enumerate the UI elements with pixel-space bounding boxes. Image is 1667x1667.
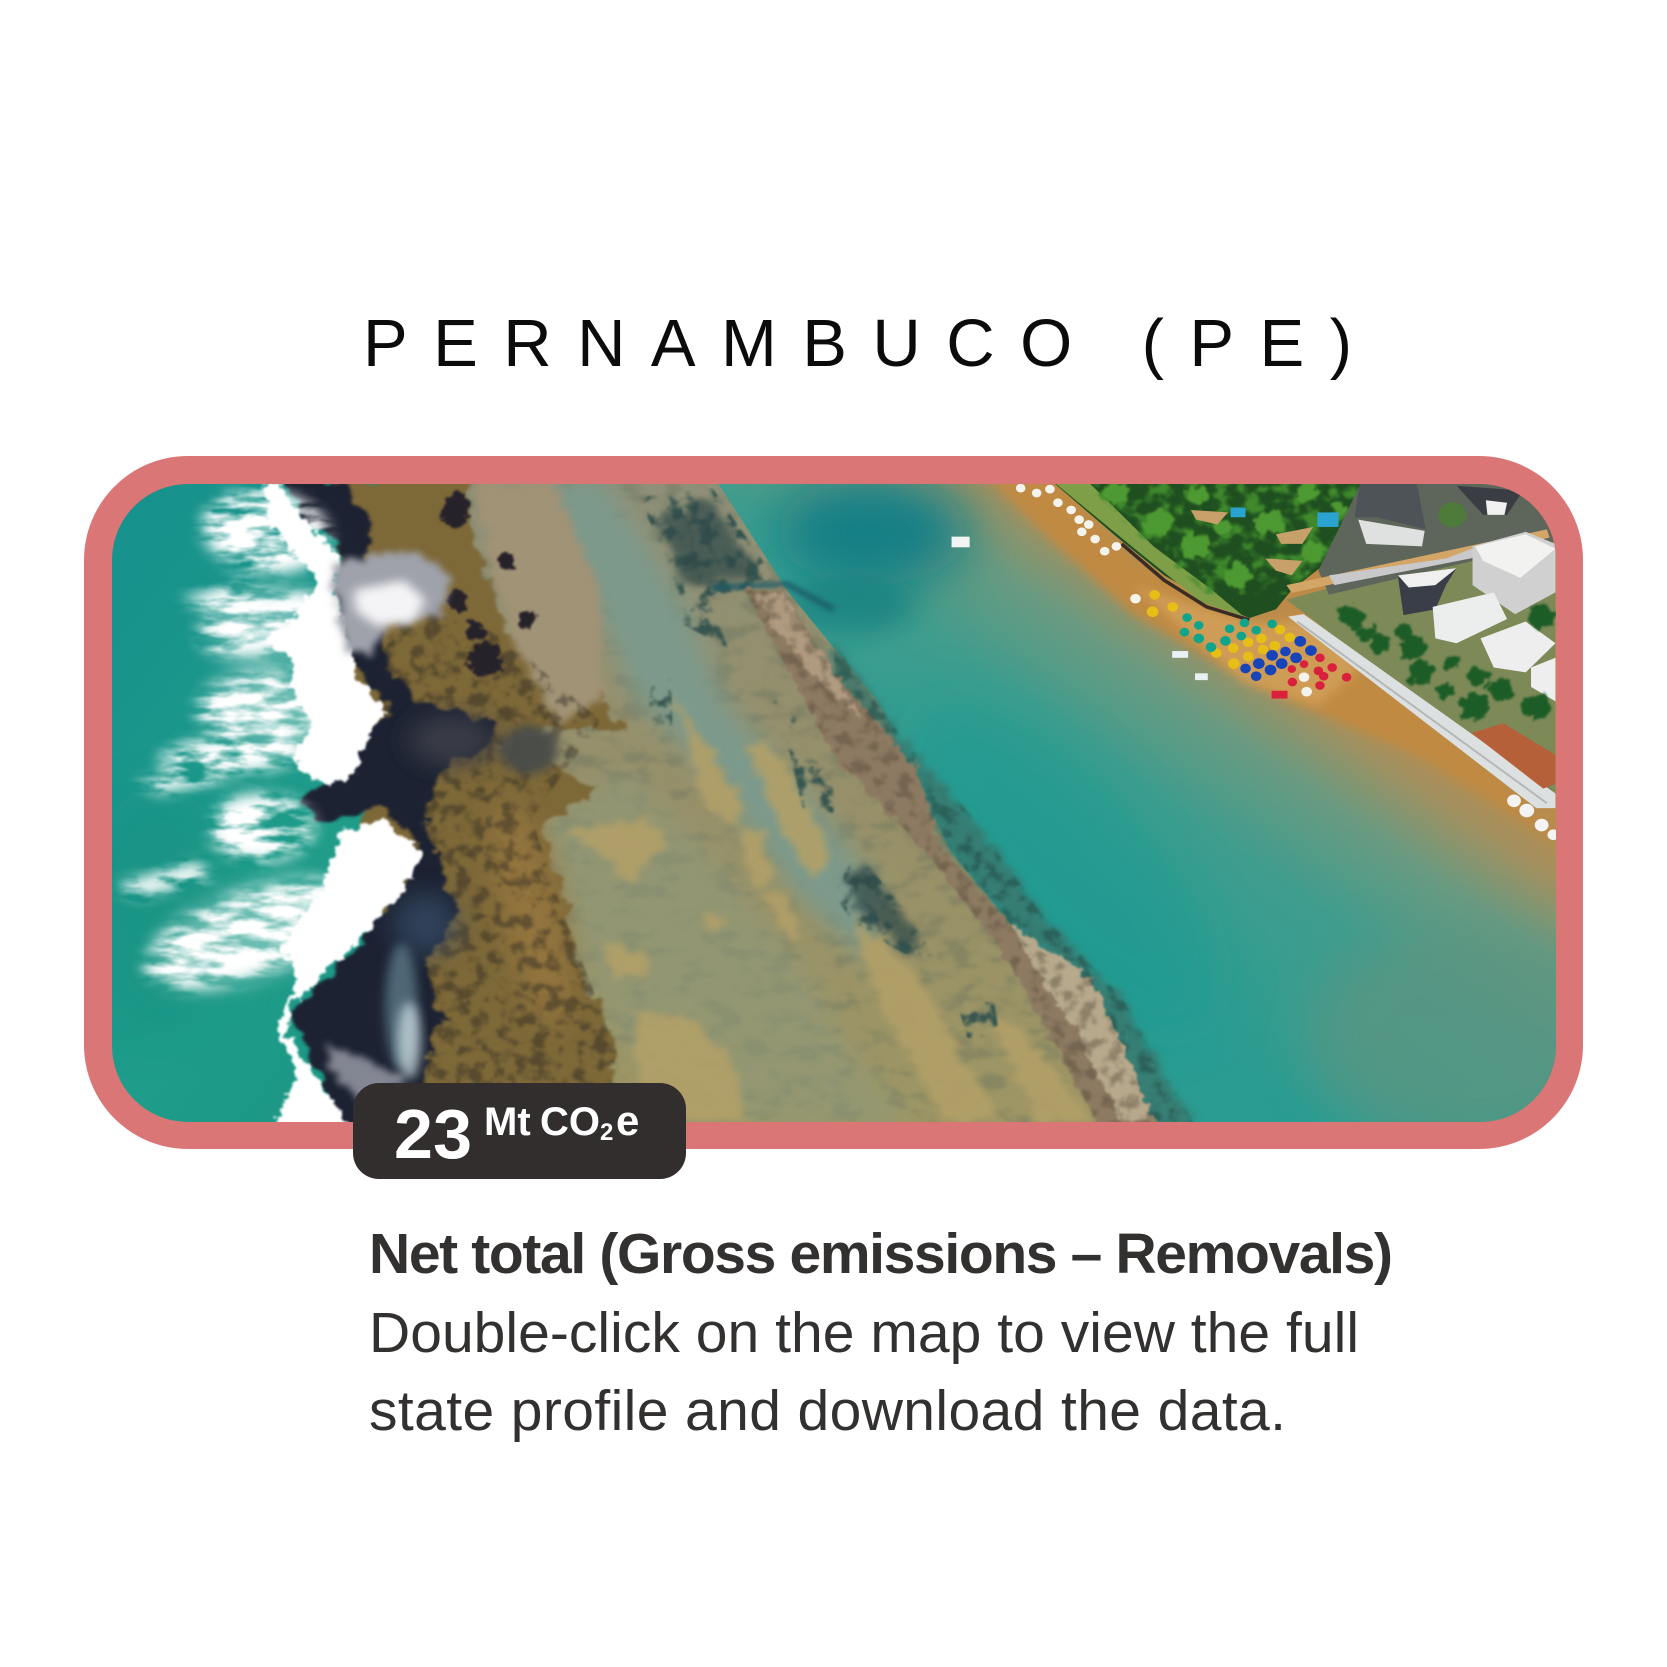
grey-blue channel xyxy=(548,478,877,963)
seawall xyxy=(1288,614,1555,808)
caption body line 2: state profile and download the data. xyxy=(369,1379,1286,1443)
deck xyxy=(1471,723,1555,789)
frame border xyxy=(84,456,1583,1149)
palm vegetation xyxy=(1052,481,1361,620)
badge unit: e xyxy=(616,1097,639,1144)
badge: net total value xyxy=(353,1083,686,1179)
dark rocks xyxy=(276,478,494,1128)
caption heading: Net total (Gross emissions – Removals) xyxy=(369,1222,1393,1286)
badge unit: CO xyxy=(540,1100,600,1144)
rocky ridge xyxy=(744,590,1159,1128)
rock mottling xyxy=(380,612,617,1083)
caption body line 1: Double-click on the map to view the full xyxy=(369,1301,1359,1365)
aerial coastal photo xyxy=(112,484,1556,1122)
garden palms xyxy=(1339,604,1555,720)
olive reef flat xyxy=(464,484,1098,1122)
badge unit: Mt xyxy=(484,1100,542,1144)
panel: photo frame xyxy=(84,456,1627,1149)
tan sand patches xyxy=(563,692,1095,1122)
caption text block xyxy=(369,1222,1393,1443)
beach umbrellas xyxy=(952,484,1351,699)
reef edge shallow xyxy=(834,643,1196,1128)
badge unit: 2 xyxy=(600,1119,613,1146)
ocean xyxy=(112,484,430,1122)
lagoon-side dark reef patches xyxy=(638,488,999,1038)
surf foam xyxy=(114,481,449,1128)
headland wave xyxy=(330,551,449,655)
lagoon water xyxy=(691,478,1563,1128)
brown rock band xyxy=(340,478,622,1128)
beach sand xyxy=(989,478,1555,842)
badge number: 23 xyxy=(394,1095,472,1173)
title: PERNAMBUCO (PE) xyxy=(363,306,1352,381)
foam fans xyxy=(114,484,340,1000)
waterfront land and buildings xyxy=(1286,483,1559,840)
